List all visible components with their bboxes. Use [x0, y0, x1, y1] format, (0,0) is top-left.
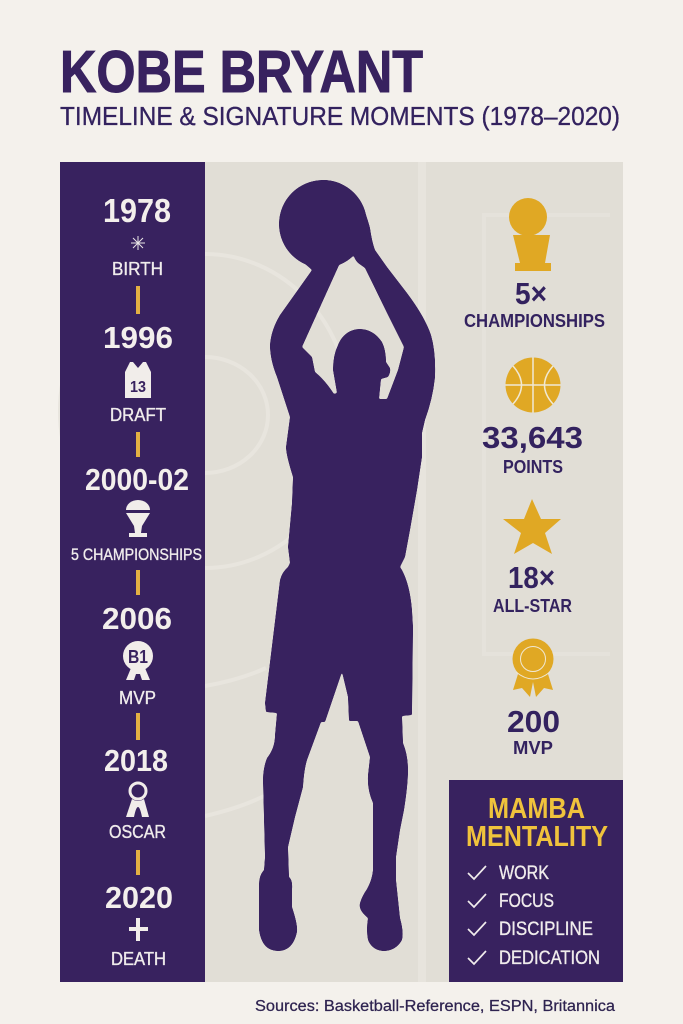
icon: birth asterisk [131, 236, 145, 250]
stat: all-star: ALL-STAR [493, 595, 572, 616]
subtitle: TIMELINE & SIGNATURE MOMENTS (1978–2020) [60, 101, 620, 131]
timeline entry: 2000-02 championships: 5 CHAMPIONSHIPS [71, 545, 202, 564]
heading [466, 793, 608, 853]
checklist: WORK [499, 862, 549, 884]
icon: jersey 13: 13 [130, 379, 146, 396]
title: KOBE BRYANT [60, 39, 423, 105]
timeline entry: 2006 MVP [102, 601, 172, 708]
icon: cross [129, 918, 148, 941]
timeline entry: 2000-02 championships: 2000-02 [85, 462, 189, 497]
icon: gold trophy [509, 198, 551, 271]
timeline entry: 1978 birth [103, 192, 171, 279]
timeline entry: 2000-02 championships [71, 462, 202, 564]
timeline entry: 2020 death [105, 880, 173, 969]
connector bar [136, 850, 140, 875]
sources: Sources: Basketball-Reference, ESPN, Britannica [255, 998, 615, 1015]
connector bar [136, 286, 140, 314]
stat: MVP: 200 [507, 704, 560, 739]
icon: basketball [506, 358, 560, 412]
icon: Oscar ribbon [126, 783, 149, 817]
timeline entry: 2018 Oscar [104, 743, 168, 842]
timeline entry: 2020 death: 2020 [105, 880, 173, 915]
stat: championships [464, 198, 605, 331]
stat: points [482, 358, 583, 477]
timeline entry: 1996 draft: 1996 [103, 320, 173, 355]
stat: championships: CHAMPIONSHIPS [464, 310, 605, 331]
timeline entry: 2020 death: DEATH [111, 949, 166, 969]
timeline entry: 1978 birth: 1978 [103, 192, 171, 229]
connector bar [136, 570, 140, 595]
stat: MVP: MVP [513, 737, 553, 758]
checklist [468, 862, 600, 969]
panel: court background [60, 162, 623, 982]
checklist: DEDICATION [499, 947, 600, 969]
connector bar [136, 713, 140, 740]
stat: points: 33,643 [482, 420, 583, 455]
timeline entry: 2006 MVP: 2006 [102, 601, 172, 636]
timeline entry: 1996 draft [103, 320, 173, 425]
checklist: DISCIPLINE [499, 918, 593, 940]
stat: all-star: 18× [508, 560, 555, 595]
icon: star [503, 499, 561, 554]
checklist: FOCUS [499, 890, 554, 912]
icon: MVP medal: B1 [128, 647, 148, 667]
stat: MVP [507, 638, 560, 758]
timeline entry: 2006 MVP: MVP [119, 688, 156, 708]
timeline entry: 2018 Oscar: OSCAR [109, 822, 166, 842]
heading: MENTALITY [466, 821, 608, 853]
stat: points: POINTS [503, 456, 563, 477]
timeline entry: 1978 birth: BIRTH [112, 259, 163, 279]
heading: MAMBA [488, 793, 585, 825]
stat: championships: 5× [515, 276, 547, 311]
icon: trophy [126, 500, 150, 537]
panel: mamba mentality [449, 780, 623, 982]
panel: timeline [60, 162, 205, 982]
timeline entry: 2018 Oscar: 2018 [104, 743, 168, 778]
icon: gold medal [512, 638, 554, 697]
stat: all-star [493, 499, 572, 616]
timeline entry: 1996 draft: DRAFT [110, 405, 166, 425]
player silhouette [259, 180, 435, 951]
connector bar [136, 432, 140, 457]
